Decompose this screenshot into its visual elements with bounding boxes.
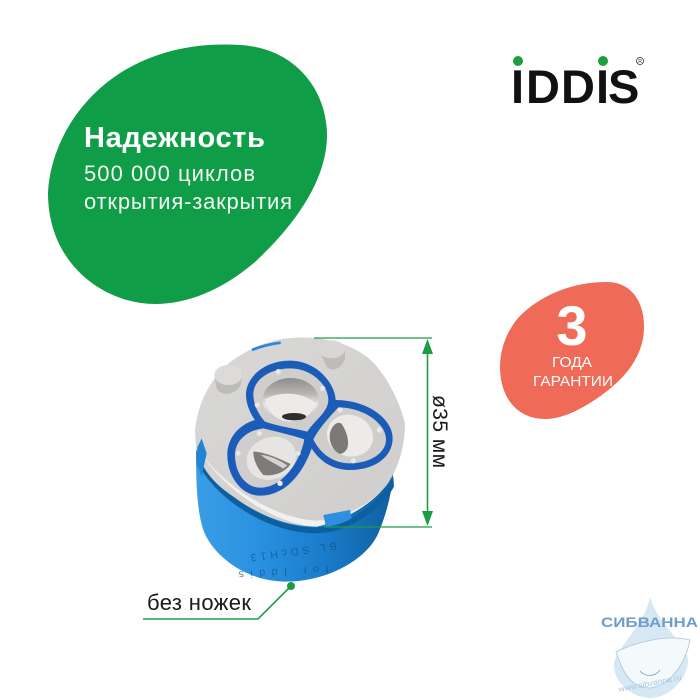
seal cell: right [313, 407, 386, 463]
vertical line [426, 345, 428, 520]
callout label: без ножек [147, 590, 251, 615]
logo wordmark: IDDIS [511, 60, 639, 113]
watermark name: СИБВАННА [601, 614, 698, 630]
seal cell: top [253, 368, 328, 432]
text: cycles line 1: 500 000 циклов [84, 161, 255, 186]
callout leader [143, 586, 291, 619]
port top [263, 378, 319, 422]
logo dots [513, 56, 608, 66]
text: cycles line 2: открытия-закрытия [84, 189, 292, 214]
down arrow [422, 511, 433, 526]
cartridge top cap [195, 338, 405, 527]
watermark: Sibvanna [601, 597, 698, 698]
bottom extension line [324, 526, 432, 528]
seal cell: left [235, 428, 304, 488]
panel: warranty blob [500, 282, 644, 419]
warranty label line 2: ГАРАНТИИ [533, 373, 613, 390]
cartridge body [196, 420, 393, 582]
callout: no legs [143, 582, 295, 619]
left clip [197, 438, 207, 477]
seal tabs [236, 369, 382, 486]
peg right [318, 340, 345, 369]
cap lower edge [197, 447, 390, 527]
port left [240, 429, 303, 487]
watermark drop [614, 597, 688, 698]
blue seal outline [227, 361, 393, 496]
up arrow [422, 339, 433, 354]
top extension line [314, 337, 432, 339]
body embossed text: BL SDcH13 [250, 539, 337, 563]
illustration: cartridge [195, 338, 405, 582]
cartridge shadow rim [197, 448, 394, 533]
heading: reliability: Надежность [84, 122, 265, 154]
dimension line: 35 mm [314, 338, 451, 527]
top blue mark [252, 343, 281, 350]
side clip [323, 510, 352, 527]
peg left [214, 365, 243, 394]
watermark url: www.sibvanna.ru [617, 673, 682, 694]
logo registered mark: R [638, 59, 642, 65]
warranty number: 3 [556, 294, 588, 357]
port right [321, 408, 379, 463]
body embossed text: for Iddis [238, 562, 329, 580]
callout dot [287, 582, 295, 590]
body embossed text [238, 539, 337, 580]
panel: green reliability blob [48, 45, 327, 304]
logo: IDDIS [511, 56, 644, 113]
watermark bathtub [616, 638, 690, 688]
warranty label line 1: ГОДА [552, 354, 592, 371]
watermark face [640, 670, 660, 675]
dimension label: ø35 мм [428, 395, 451, 468]
